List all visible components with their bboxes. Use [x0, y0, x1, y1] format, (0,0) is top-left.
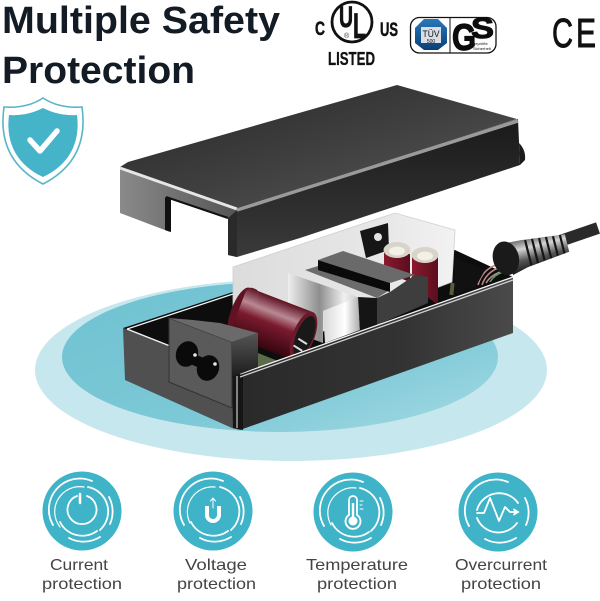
- icon: CE mark: [552, 10, 596, 56]
- icon: overcurrent protection: [458, 472, 538, 552]
- label: overcurrent protection: Overcurrent: [455, 557, 548, 574]
- base left wall: [123, 328, 240, 430]
- icon: shield with check: [3, 98, 83, 184]
- bracket: [360, 223, 389, 258]
- circuit board backing: [233, 213, 455, 340]
- icon: CE mark: C: [552, 10, 573, 56]
- socket plate: [169, 318, 232, 408]
- socket holes: [172, 338, 223, 384]
- title: Multiple Safety: [2, 0, 280, 42]
- transformer: [305, 266, 390, 298]
- green circuit board: [257, 353, 283, 372]
- icon: TUV GS mark: [410, 13, 496, 58]
- icon: TUV GS mark: 500: [427, 39, 435, 45]
- lid front face: [228, 119, 520, 257]
- title: [2, 0, 280, 92]
- connector block: [455, 257, 485, 295]
- strain relief: [489, 227, 571, 279]
- icon: UL listed mark: LISTED: [328, 49, 375, 69]
- label: temperature protection: [306, 557, 408, 593]
- icon: voltage protection: [174, 472, 252, 550]
- icon: UL listed mark: [315, 1, 398, 69]
- heat sink: [288, 273, 358, 343]
- label: overcurrent protection: [455, 557, 548, 593]
- label: voltage protection: [177, 557, 256, 593]
- label: current protection: Current: [50, 557, 109, 574]
- icon: TUV GS mark: S: [471, 13, 494, 45]
- rim highlights: [127, 277, 513, 377]
- label: voltage protection: protection: [177, 576, 256, 593]
- icon: temperature protection: [314, 472, 392, 552]
- icon: current protection: [42, 472, 122, 550]
- icon: UL listed mark: U: [339, 1, 353, 34]
- power adapter lid: [120, 85, 525, 257]
- coloured wires: [478, 265, 500, 285]
- label: temperature protection: protection: [317, 576, 397, 593]
- lid side face: [120, 167, 237, 232]
- large capacitor: [222, 284, 323, 366]
- label: temperature protection: Temperature: [306, 557, 408, 574]
- icon: UL listed mark: US: [380, 20, 398, 41]
- base interior: [123, 250, 513, 375]
- icon: UL listed mark: L: [353, 7, 366, 46]
- label: voltage protection: Voltage: [185, 557, 247, 574]
- small capacitors: [384, 250, 410, 282]
- icon: TUV GS mark: TÜV: [422, 29, 440, 39]
- icon: UL listed mark: ®: [344, 32, 350, 40]
- label: overcurrent protection: protection: [461, 576, 541, 593]
- lid knob: [519, 143, 525, 165]
- icon: TUV GS mark: geprüfte: [473, 41, 488, 46]
- icon: TUV GS mark: G: [452, 17, 476, 58]
- cable: [560, 228, 598, 241]
- power adapter base: [123, 213, 598, 430]
- icon: TUV GS mark: Sicherheit: [473, 46, 492, 51]
- socket tab: [232, 333, 258, 377]
- background disc: [35, 279, 547, 461]
- label: current protection: [42, 557, 122, 593]
- icon: UL listed mark: C: [315, 19, 325, 40]
- label: current protection: protection: [42, 576, 122, 593]
- title: Protection: [2, 50, 195, 92]
- base right wall: [240, 277, 513, 430]
- lid top face: [120, 85, 517, 210]
